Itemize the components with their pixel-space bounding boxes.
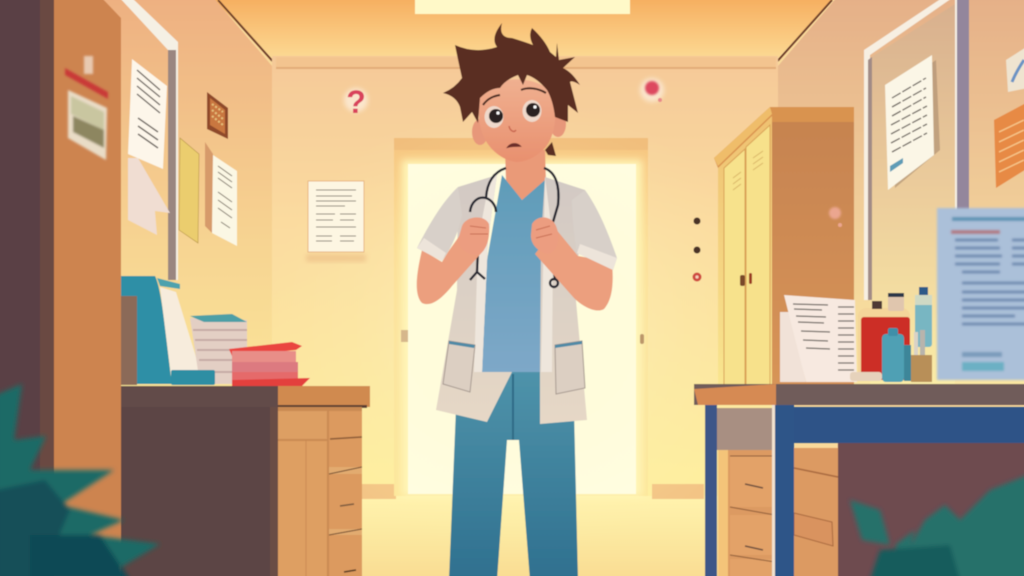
- warm glow around door: [260, 100, 780, 560]
- wall decoration: checklist sheet: [205, 142, 237, 246]
- desk drawers: [329, 411, 362, 576]
- floating question mark left: ?: [346, 84, 366, 120]
- left desk: [121, 386, 370, 576]
- floating question mark right: [640, 78, 664, 102]
- doctor character: [417, 23, 617, 576]
- saucer: [850, 372, 882, 381]
- cup of instruments: [911, 330, 932, 382]
- red jar: [858, 293, 910, 380]
- sleeves: [417, 187, 617, 270]
- neck: [505, 150, 546, 200]
- short teal bottle: [882, 328, 911, 382]
- wardrobe: [714, 107, 854, 385]
- wardrobe smudge: [829, 207, 841, 219]
- pinned paper: [885, 55, 940, 190]
- cabinet label: [65, 56, 108, 160]
- baseboard: [362, 484, 704, 499]
- face: [478, 79, 555, 162]
- desk frame: [712, 408, 776, 450]
- right pin board: [864, 0, 969, 384]
- coat: [436, 175, 587, 424]
- foreground plant right: [850, 475, 1024, 576]
- right wall notices: [994, 46, 1024, 188]
- back wall notice: [306, 181, 366, 262]
- wardrobe doors: [724, 125, 770, 385]
- foreground blurred document: [937, 208, 1024, 380]
- paper stack: [190, 314, 247, 384]
- document stack: [780, 295, 857, 382]
- foreground cabinet left: [0, 0, 121, 576]
- tall teal bottle: [915, 287, 932, 347]
- desk stack: teal binder and files: [120, 276, 310, 386]
- ceiling: [210, 0, 836, 66]
- left wall: [100, 0, 272, 490]
- nose and mouth: [508, 126, 520, 147]
- arms: [417, 228, 613, 311]
- floor: [362, 496, 732, 576]
- right desk: [694, 384, 1024, 576]
- desk top: [694, 384, 1024, 405]
- board paper: [128, 59, 170, 235]
- desk items: [780, 287, 932, 382]
- red folders: [229, 342, 310, 386]
- hair: [443, 23, 580, 123]
- doorway: [394, 138, 648, 496]
- wall decoration: plaque: [207, 92, 228, 139]
- ceiling light: [415, 0, 630, 14]
- eyes: [483, 88, 546, 128]
- wall dots: [692, 218, 702, 282]
- trousers: [449, 372, 578, 576]
- scrub shirt: [482, 175, 545, 372]
- coat pockets: [443, 341, 475, 392]
- left pin board: [118, 0, 178, 280]
- back wall: [272, 56, 778, 496]
- wall decoration: yellow sheet: [179, 138, 199, 243]
- desk door: [278, 411, 327, 576]
- hands: [458, 217, 558, 255]
- teal box: [171, 370, 215, 385]
- ears: [472, 111, 566, 145]
- lower cabinet: [718, 443, 1024, 576]
- stethoscope: [470, 168, 558, 287]
- right wall: [778, 0, 1024, 400]
- foreground plant left: [0, 384, 160, 576]
